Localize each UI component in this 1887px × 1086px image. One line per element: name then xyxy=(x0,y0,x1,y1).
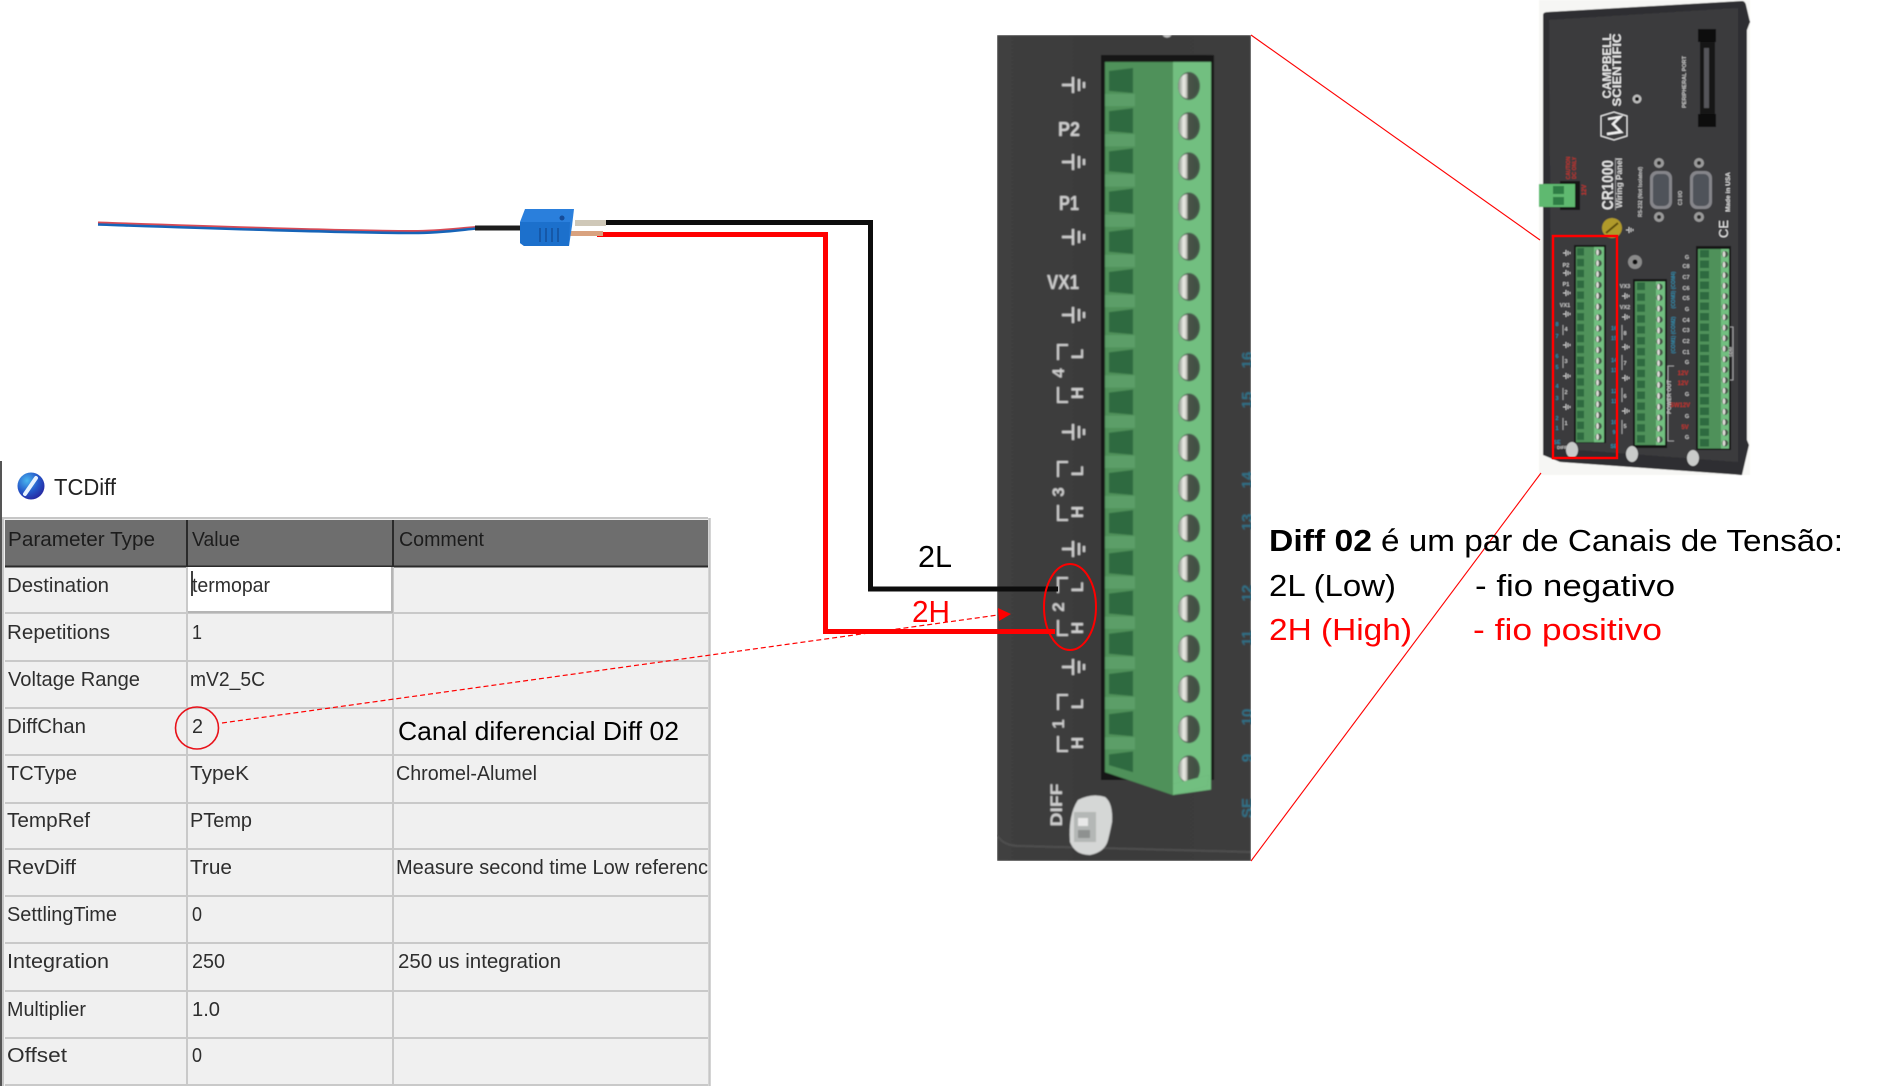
differential channel labels: 4 xyxy=(1049,368,1068,378)
right column labels xyxy=(1667,255,1733,441)
table header row: Value xyxy=(192,529,240,551)
right column labels: C1 xyxy=(1682,350,1690,356)
table rows: 0 xyxy=(192,904,202,926)
terminal labels: P1 xyxy=(1059,193,1079,215)
wires to terminals xyxy=(597,222,1058,632)
table rows: mV2_5C xyxy=(190,669,265,691)
differential channel labels: L xyxy=(1068,582,1087,592)
table rows: termopar xyxy=(192,575,270,597)
middle column labels: 6 xyxy=(1623,394,1627,400)
middle column labels: 15 xyxy=(1611,336,1617,342)
table rows: DiffChan xyxy=(7,716,86,738)
selected value cell xyxy=(188,567,392,612)
differential brackets xyxy=(1058,345,1068,751)
text block: Diff 02 explanation: - fio negativo xyxy=(1475,568,1675,603)
serial ports: RS-232 (Not Isolated) xyxy=(1638,167,1644,217)
middle column labels: VX3 xyxy=(1620,284,1630,290)
black wire 2L xyxy=(606,222,1058,589)
differential channel labels xyxy=(1049,348,1084,826)
side channel numbers xyxy=(1241,352,1251,818)
differential channel labels: H xyxy=(1068,622,1087,634)
terminal strip xyxy=(1101,55,1214,795)
differential channel labels: L xyxy=(1068,349,1087,359)
serial ports: C3 I/O xyxy=(1678,191,1684,205)
middle column labels: 16 xyxy=(1611,326,1617,332)
table rows: 250 us integration xyxy=(398,951,561,973)
right column labels: G xyxy=(1685,414,1689,420)
right column labels: C5 xyxy=(1682,296,1690,302)
side channel numbers: 14 xyxy=(1239,471,1256,488)
table rows: 1.0 xyxy=(192,999,220,1021)
right column labels: SW12V xyxy=(1670,403,1690,409)
left column labels: 3 xyxy=(1564,359,1568,365)
differential channel labels: 1 xyxy=(1049,719,1068,729)
table rows: TempRef xyxy=(7,810,90,832)
middle column labels: 12 xyxy=(1611,389,1617,395)
differential channel labels: L xyxy=(1068,466,1087,476)
table rows: Measure second time Low referenc xyxy=(396,857,708,879)
left column labels: 8 xyxy=(1555,322,1559,328)
power plug: 12V xyxy=(1582,185,1588,195)
table rows: 1 xyxy=(192,622,202,644)
text block: Diff 02 explanation: - fio positivo xyxy=(1473,612,1662,647)
side channel numbers: 11 xyxy=(1239,630,1256,646)
text block: Diff 02 explanation: 2L (Low) xyxy=(1269,568,1396,603)
middle column labels: 7 xyxy=(1623,361,1627,367)
table xyxy=(3,518,710,1086)
right column labels: G xyxy=(1685,392,1689,398)
left column labels: 6 xyxy=(1555,354,1559,360)
side channel numbers: 10 xyxy=(1239,709,1256,725)
left column labels: 1 xyxy=(1555,426,1559,432)
zoom lines xyxy=(1251,35,1541,861)
power plug: CAUTION xyxy=(1566,156,1572,179)
table header row: Comment xyxy=(399,529,484,551)
side channel numbers: 16 xyxy=(1239,352,1256,368)
label: 2H: 2H xyxy=(912,594,950,629)
window edge xyxy=(0,461,2,1086)
left column labels: 2 xyxy=(1564,390,1568,396)
highlight box xyxy=(1553,236,1617,458)
table rows: TCType xyxy=(7,763,77,785)
thermocouple wire xyxy=(98,222,522,233)
left column labels: 4 xyxy=(1564,327,1568,333)
differential channel labels: 2 xyxy=(1049,602,1068,612)
table rows xyxy=(7,575,708,1067)
text block: Diff 02 explanation xyxy=(1269,523,1843,647)
left column labels: P2 xyxy=(1563,263,1569,269)
right column labels: (COM3) (COM4) xyxy=(1671,271,1677,308)
text block: Diff 02 explanation: 2H (High) xyxy=(1269,612,1412,647)
highlight circle: DiffChan value xyxy=(176,707,218,749)
serial ports xyxy=(1638,158,1732,238)
right column labels: G xyxy=(1685,435,1689,441)
serial ports: Made in USA xyxy=(1725,172,1732,212)
standoff xyxy=(1628,255,1642,269)
table header row: Parameter Type xyxy=(8,529,155,551)
differential channel labels: H xyxy=(1068,737,1087,749)
terminal labels: P2 xyxy=(1058,119,1080,141)
middle column labels: 13 xyxy=(1611,368,1617,374)
right column labels: C6 xyxy=(1682,286,1690,292)
terminal labels: VX1 xyxy=(1047,272,1079,294)
table rows: RevDiff xyxy=(7,857,76,879)
middle column labels: 5 xyxy=(1623,424,1627,430)
left column labels: 7 xyxy=(1555,334,1559,340)
middle column labels: 9 xyxy=(1612,430,1616,436)
logo: Campbell Scientific xyxy=(1601,34,1627,140)
table rows: 0 xyxy=(192,1045,202,1067)
label: 2L: 2L xyxy=(918,539,952,574)
right column labels: SDM xyxy=(1728,347,1733,357)
screw hole xyxy=(1632,94,1642,104)
side channel numbers: 12 xyxy=(1239,585,1256,601)
panel: parameter table window xyxy=(1,461,710,1086)
highlight ellipse: terminal 2 xyxy=(1044,564,1096,650)
table rows: Repetitions xyxy=(7,622,110,644)
left column labels: VX1 xyxy=(1560,303,1570,309)
table rows: SettlingTime xyxy=(7,904,117,926)
right column labels: (COM1) (COM2) xyxy=(1671,316,1677,353)
middle column labels: VX2 xyxy=(1620,305,1630,311)
right column labels: C7 xyxy=(1682,275,1690,281)
left column labels: DIFF xyxy=(1557,445,1567,450)
table rows: True xyxy=(190,857,232,879)
left column labels xyxy=(1553,250,1570,450)
middle column labels: 14 xyxy=(1611,358,1618,364)
table rows: Integration xyxy=(7,951,109,973)
middle column labels xyxy=(1610,284,1630,450)
side channel numbers: 15 xyxy=(1239,392,1256,408)
callout: dashed link from DiffChan to terminal xyxy=(222,608,1011,723)
icon: thermocouple connector xyxy=(520,209,606,246)
side channel numbers: SE xyxy=(1239,798,1256,818)
right column labels: G xyxy=(1685,307,1689,313)
table rows: Canal diferencial Diff 02 xyxy=(398,716,679,746)
middle column labels: 11 xyxy=(1611,399,1617,405)
right column labels: POWER OUT xyxy=(1667,379,1673,414)
table rows: 250 xyxy=(192,951,225,973)
icon: TCDiff instruction xyxy=(18,472,44,500)
icons: ground symbols xyxy=(1062,77,1084,675)
peripheral port xyxy=(1682,29,1716,127)
middle column labels: 8 xyxy=(1623,331,1627,337)
logo: Campbell Scientific: SCIENTIFIC xyxy=(1612,34,1624,106)
model name: Wiring Panel xyxy=(1614,158,1624,208)
peripheral port: PERIPHERAL PORT xyxy=(1682,56,1688,108)
serial ports: CE xyxy=(1716,220,1731,238)
photo: full CR1000 wiring panel xyxy=(1539,0,1750,475)
terminal labels xyxy=(1047,119,1080,294)
table rows: Chromel-Alumel xyxy=(396,763,537,785)
table rows: 2 xyxy=(192,716,203,738)
left column labels: 4 xyxy=(1555,384,1559,390)
side channel numbers: 13 xyxy=(1239,514,1256,530)
table rows: Offset xyxy=(7,1045,67,1067)
clear clips xyxy=(1566,442,1699,466)
red wire 2H xyxy=(597,234,1055,632)
text block: Diff 02 explanation: é um par de Canais de Tensão: xyxy=(1381,523,1843,558)
table rows: PTemp xyxy=(190,810,252,832)
model name: CR1000 xyxy=(1600,160,1617,210)
table rows: Multiplier xyxy=(7,999,86,1021)
differential channel labels: L xyxy=(1068,699,1087,709)
icon: clear clip xyxy=(1070,796,1112,855)
differential channel labels: 3 xyxy=(1049,487,1068,497)
left column labels: SE xyxy=(1553,440,1561,446)
table rows: Destination xyxy=(7,575,109,597)
right column labels: C4 xyxy=(1682,318,1690,324)
photo: datalogger terminal close-up xyxy=(997,32,1256,861)
text block: Diff 02 explanation: Diff 02 xyxy=(1269,523,1372,558)
power plug: DC ONLY xyxy=(1572,156,1578,179)
differential channel labels: DIFF xyxy=(1047,784,1066,826)
table rows: TypeK xyxy=(190,763,250,785)
window title: TCDiff xyxy=(54,474,117,500)
model name xyxy=(1600,158,1624,210)
left column labels: P1 xyxy=(1563,282,1569,288)
logo: Campbell Scientific: CAMPBELL xyxy=(1602,34,1614,98)
right column labels: 12V xyxy=(1678,381,1688,387)
ground lug xyxy=(1602,218,1633,238)
right column labels: G xyxy=(1685,255,1689,261)
middle column labels: SE xyxy=(1610,444,1618,450)
right column labels: C8 xyxy=(1682,264,1690,270)
power plug xyxy=(1539,156,1588,210)
right column labels: C3 xyxy=(1682,328,1690,334)
right column labels: G xyxy=(1685,360,1689,366)
differential channel labels: H xyxy=(1068,387,1087,399)
right column labels: 5V xyxy=(1681,425,1689,431)
table header row xyxy=(5,520,708,566)
side channel numbers: 9 xyxy=(1239,754,1256,762)
left column labels: 2 xyxy=(1555,416,1559,422)
right column labels: 12V xyxy=(1678,371,1688,377)
left column labels: 3 xyxy=(1555,396,1559,402)
table rows: Voltage Range xyxy=(8,669,140,691)
terminal strips xyxy=(1574,245,1731,450)
left column labels: 1 xyxy=(1564,421,1568,427)
differential channel labels: H xyxy=(1068,506,1087,518)
middle column labels: 10 xyxy=(1611,420,1617,426)
left column labels: 5 xyxy=(1555,365,1559,371)
right column labels: C2 xyxy=(1682,339,1690,345)
